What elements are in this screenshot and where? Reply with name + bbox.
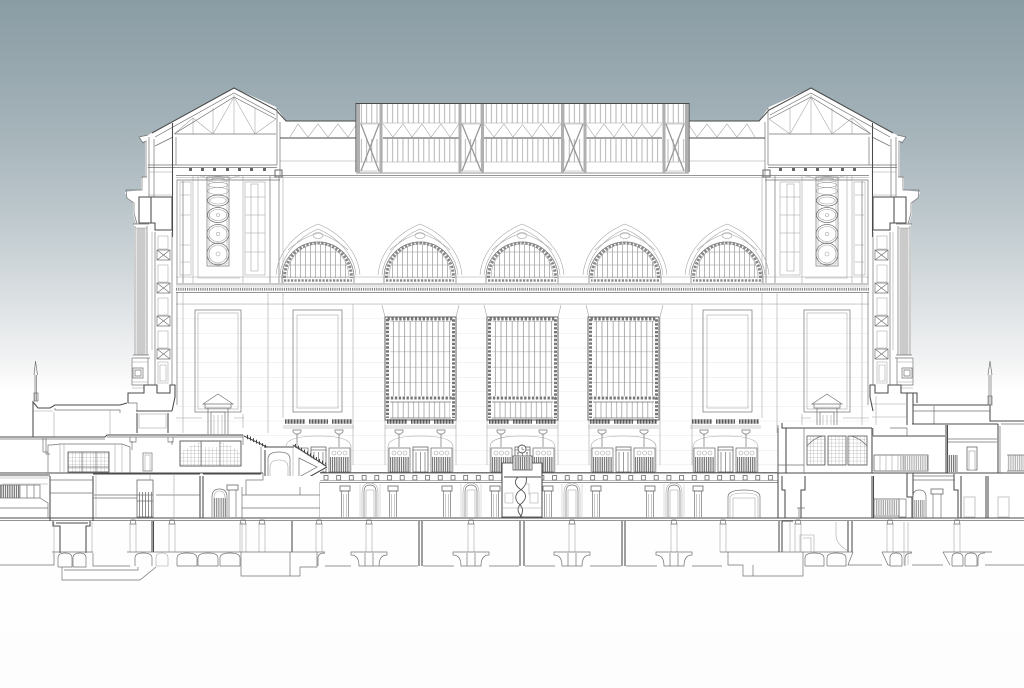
central staircase	[243, 434, 327, 487]
right low building upper storey	[778, 423, 1024, 473]
centre arch window	[480, 224, 564, 283]
right half of upper building	[522, 88, 920, 472]
basement walls and arch piers	[127, 520, 992, 566]
central clock and spiral stair	[502, 445, 542, 518]
main hall windows	[385, 317, 659, 420]
hall under-floor band and columns	[320, 473, 780, 520]
right middle storey	[778, 473, 1024, 520]
left middle storey	[0, 473, 320, 521]
left low building upper storey	[0, 435, 263, 476]
left half of upper building	[125, 88, 523, 472]
hall lower bays with doors	[283, 422, 761, 472]
right terrace and lamp post	[872, 361, 1024, 428]
left shaft and basement	[0, 521, 317, 580]
left terrace and lamp post	[33, 361, 172, 437]
right basement and ground line	[728, 552, 1024, 576]
